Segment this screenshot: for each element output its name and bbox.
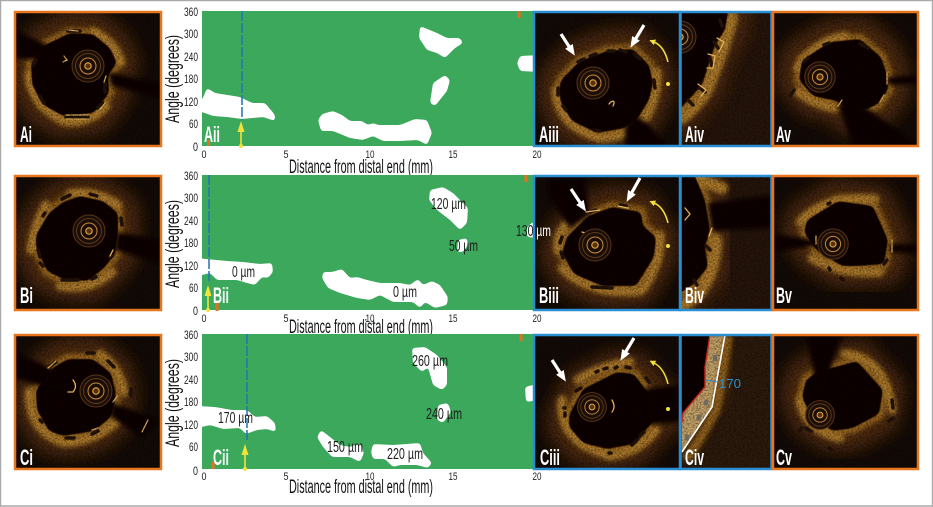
x axis: 5 — [284, 471, 288, 483]
label: Aii: Aii — [204, 122, 220, 147]
x axis: 10 — [366, 149, 374, 161]
yellow arrow — [238, 121, 244, 148]
x axis title: Distance from distal end (mm) — [289, 157, 433, 178]
yellow arrow — [204, 285, 212, 312]
label: Av: Av — [776, 122, 791, 147]
y axis: 240 — [184, 50, 198, 64]
dashed position line — [208, 175, 210, 282]
label: Ci: Ci — [20, 445, 33, 470]
y axis: 300 — [184, 350, 198, 364]
y axis: 120 — [184, 418, 198, 432]
label: Ciii: Ciii — [540, 445, 560, 470]
y axis title: Angle (degrees) — [163, 359, 184, 447]
y axis: 60 — [189, 440, 198, 454]
yellow arrow — [242, 444, 248, 471]
y axis: 0 — [193, 464, 198, 478]
panel: Av OCT frame — [772, 12, 920, 147]
red lumen border — [682, 335, 710, 423]
x axis title: Distance from distal end (mm) — [289, 477, 433, 498]
white arrow — [625, 338, 634, 353]
y axis: 240 — [184, 373, 198, 387]
yellow dot — [666, 407, 670, 411]
x axis: 0 — [202, 313, 206, 325]
label: Civ: Civ — [685, 445, 704, 470]
y axis: 300 — [184, 27, 198, 41]
y axis: 120 — [184, 259, 198, 273]
panel: Ciii OCT frame — [534, 335, 682, 470]
white arrow — [552, 360, 561, 374]
white arrow — [635, 25, 644, 40]
measurement value: 170 — [719, 376, 741, 391]
uncovered regions — [196, 347, 540, 468]
panel: Ai OCT frame — [15, 12, 161, 147]
label: Cv: Cv — [776, 445, 792, 470]
yellow dot — [666, 82, 670, 86]
dashed position line — [241, 11, 243, 120]
panel: Bi OCT frame — [15, 176, 161, 310]
panel: Bii coverage map — [163, 169, 542, 338]
thickness labels: 50 µm — [449, 238, 478, 255]
thickness labels — [218, 353, 462, 463]
thickness labels: 220 µm — [387, 446, 423, 463]
yellow curved arrow — [654, 203, 668, 223]
x axis: 5 — [284, 149, 288, 161]
label: 130 µm spanning map and frame: 130 µm — [516, 223, 551, 240]
white arrow — [631, 178, 640, 194]
neointima overlay — [682, 335, 725, 452]
panel: Aii coverage map — [163, 5, 542, 178]
dashed position line — [246, 334, 248, 440]
y axis: 0 — [193, 304, 198, 318]
x axis — [202, 313, 542, 325]
x axis: 0 — [202, 471, 206, 483]
y axis: 360 — [184, 169, 198, 183]
x axis: 10 — [366, 313, 374, 325]
x axis: 10 — [366, 471, 374, 483]
y axis: 180 — [184, 236, 198, 250]
y axis: 120 — [184, 95, 198, 109]
panel: Ci OCT frame — [15, 335, 161, 470]
x axis: 20 — [532, 149, 542, 161]
panel: Aiii OCT frame — [534, 12, 680, 147]
y axis: 360 — [184, 328, 198, 342]
y axis: 0 — [193, 140, 198, 154]
x axis title: Distance from distal end (mm) — [289, 317, 433, 338]
y axis — [184, 169, 198, 318]
label: Aiv: Aiv — [685, 122, 704, 147]
x axis: 5 — [284, 313, 288, 325]
panel: Civ magnified OCT with measurement — [679, 334, 773, 470]
thickness labels: 0 µm — [232, 264, 255, 281]
y axis title: Angle (degrees) — [163, 200, 184, 288]
y axis: 60 — [189, 117, 198, 131]
thickness labels: 120 µm — [431, 196, 466, 213]
orange markers — [213, 334, 521, 469]
label: Bii: Bii — [213, 283, 229, 308]
label: Bv: Bv — [776, 283, 792, 308]
y axis: 360 — [184, 5, 198, 19]
white stent border — [682, 335, 725, 452]
label: Biv: Biv — [685, 283, 704, 308]
yellow curved arrow — [654, 363, 668, 384]
orange markers — [208, 11, 519, 146]
thickness labels: 170 µm — [218, 410, 253, 427]
x axis: 15 — [448, 313, 458, 325]
label: Bi: Bi — [20, 283, 33, 308]
thickness labels: 0 µm — [393, 284, 417, 301]
orange markers — [217, 175, 526, 311]
yellow curved arrow — [654, 42, 668, 62]
thickness labels: 260 µm — [412, 353, 448, 370]
label: Biii: Biii — [539, 283, 559, 308]
label: Ai: Ai — [20, 122, 32, 147]
y axis: 180 — [184, 395, 198, 409]
y axis: 300 — [184, 191, 198, 205]
thickness labels: 150 µm — [327, 439, 363, 456]
panel: Cv OCT frame — [772, 333, 918, 470]
thickness labels: 240 µm — [426, 406, 462, 423]
y axis: 240 — [184, 214, 198, 228]
panel: Bv OCT frame — [772, 176, 918, 310]
y axis — [184, 328, 198, 478]
label: Aiii: Aiii — [539, 122, 559, 147]
y axis — [184, 5, 198, 154]
thickness labels — [232, 196, 478, 301]
y axis: 60 — [189, 281, 198, 295]
x axis: 0 — [202, 149, 206, 161]
x axis: 15 — [448, 471, 458, 483]
x axis: 20 — [532, 313, 542, 325]
x axis: 15 — [448, 149, 458, 161]
y axis: 180 — [184, 72, 198, 86]
white arrow — [571, 189, 581, 204]
white arrow — [561, 34, 570, 48]
panel: Biv magnified OCT — [679, 174, 773, 312]
label: Cii: Cii — [213, 445, 229, 470]
x axis — [202, 471, 542, 483]
panel: Biii OCT frame — [534, 176, 680, 310]
x axis — [202, 149, 542, 161]
yellow dot — [666, 244, 670, 248]
uncovered regions — [196, 187, 540, 308]
panel: Aiv magnified OCT — [679, 10, 773, 148]
uncovered regions — [196, 26, 540, 145]
measurement tick — [705, 380, 718, 382]
x axis: 20 — [532, 471, 542, 483]
panel: Cii coverage map — [163, 328, 542, 498]
